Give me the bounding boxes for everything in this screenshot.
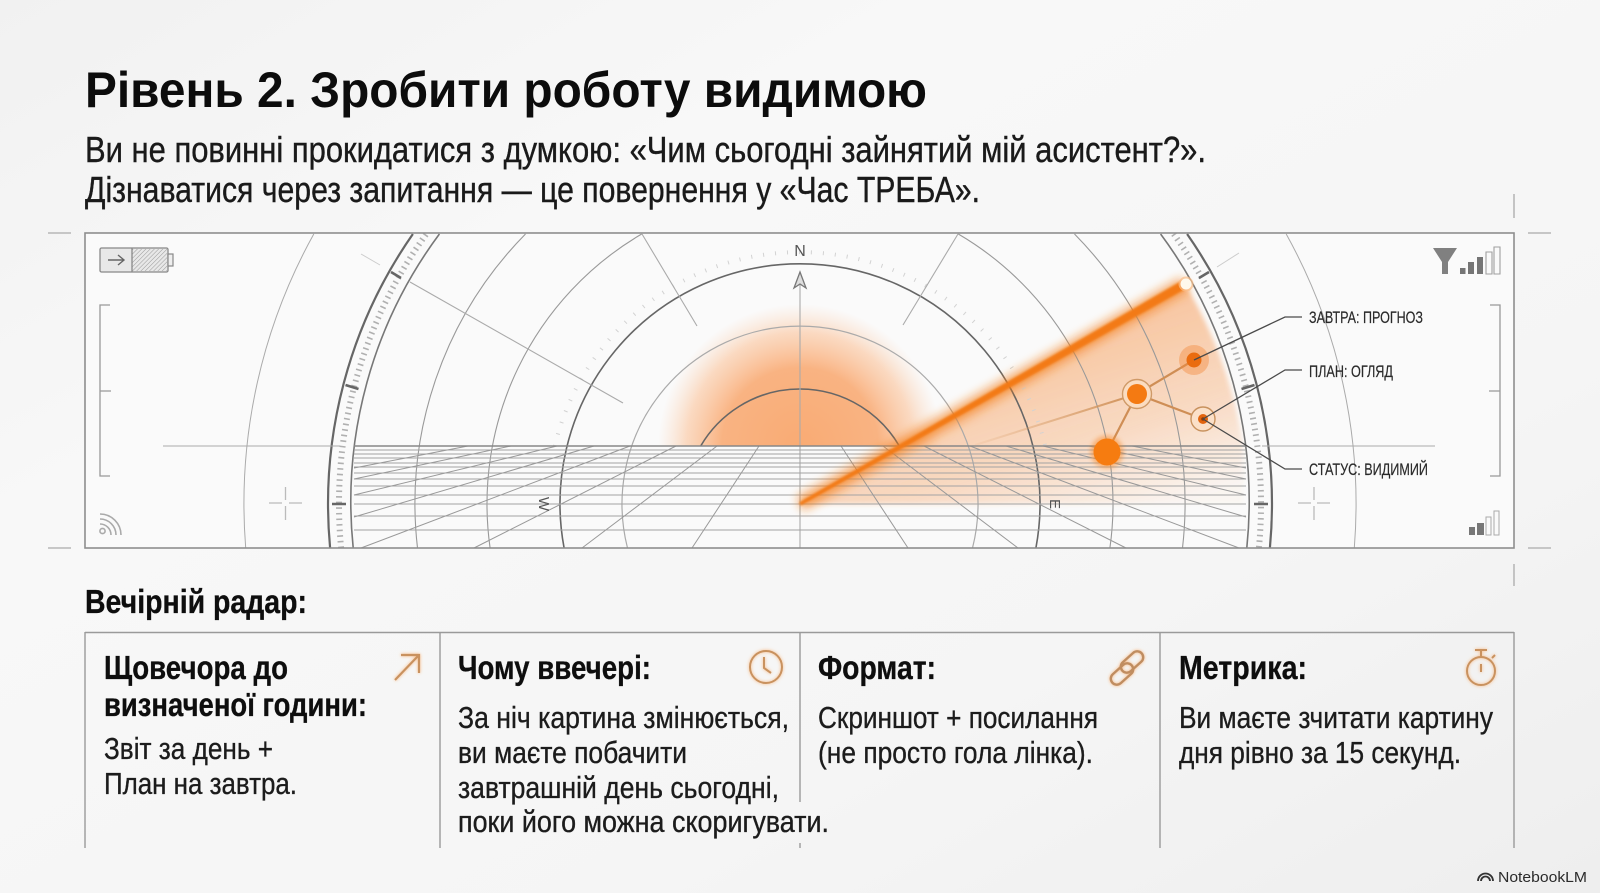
card: метрика: дня рівно за 15 секунд. [1179, 735, 1461, 770]
compass letters: W [535, 497, 552, 512]
radar arcs [163, 234, 1435, 548]
icon: arrow [395, 655, 419, 680]
callout labels: СТАТУС: ВИДИМИЙ [1309, 460, 1428, 479]
subtitle: Ви не повинні прокидатися з думкою: «Чим сьогодні зайнятий мій асистент?». [85, 129, 1206, 170]
callout lines [1194, 317, 1302, 469]
panel: radar [85, 233, 1514, 548]
logo: NotebookLM: NotebookLM [1498, 869, 1587, 886]
card: формат: (не просто гола лінка). [818, 735, 1093, 770]
compass letters: E [1046, 499, 1063, 509]
subtitle [85, 129, 1206, 210]
card: чому ввечері: ви маєте побачити [458, 735, 687, 770]
perspective grid [354, 446, 1246, 548]
card: формат [818, 649, 1146, 770]
callout labels [1309, 308, 1428, 479]
icon: rss [100, 514, 121, 535]
icon: link [1108, 649, 1146, 687]
card: чому ввечері: поки його можна скоригувати. [458, 804, 829, 839]
card: щовечора [104, 649, 419, 801]
card: формат: Формат: [818, 649, 936, 686]
card: щовечора: Щовечора до [104, 649, 288, 686]
beam [799, 276, 1194, 506]
card: чому ввечері [458, 649, 829, 839]
card: метрика: Метрика: [1179, 649, 1307, 686]
card: метрика: Ви маєте зчитати картину [1179, 700, 1493, 735]
sun glow [658, 304, 942, 446]
icon: stopwatch [1467, 650, 1495, 685]
title: Рівень 2. Зробити роботу видимою [85, 62, 927, 118]
callout labels: ЗАВТРА: ПРОГНОЗ [1309, 308, 1423, 327]
card: щовечора: Звіт за день + [104, 731, 273, 766]
card: формат: Скриншот + посилання [818, 700, 1098, 735]
icon: clock [750, 651, 782, 683]
data points [975, 345, 1215, 468]
compass letters [535, 243, 1063, 512]
card: чому ввечері: За ніч картина змінюється, [458, 700, 789, 735]
icon: battery [100, 248, 173, 272]
card: щовечора: План на завтра. [104, 766, 297, 801]
section heading: Вечірній радар: [85, 583, 307, 620]
callout labels: ПЛАН: ОГЛЯД [1309, 362, 1393, 381]
compass letters: N [794, 243, 806, 260]
card: щовечора: визначеної години: [104, 686, 367, 723]
table frame [85, 632, 1514, 848]
card: метрика [1179, 649, 1495, 770]
icon: antenna and signal [1433, 247, 1500, 274]
card: чому ввечері: завтрашній день сьогодні, [458, 770, 779, 805]
icon: signal bars [1469, 511, 1499, 535]
side brackets and crosshairs [100, 305, 1500, 520]
subtitle: Дізнаватися через запитання — це повернення у «Час ТРЕБА». [85, 169, 980, 210]
orange sector [800, 284, 1243, 504]
card: чому ввечері: Чому ввечері: [458, 649, 651, 686]
